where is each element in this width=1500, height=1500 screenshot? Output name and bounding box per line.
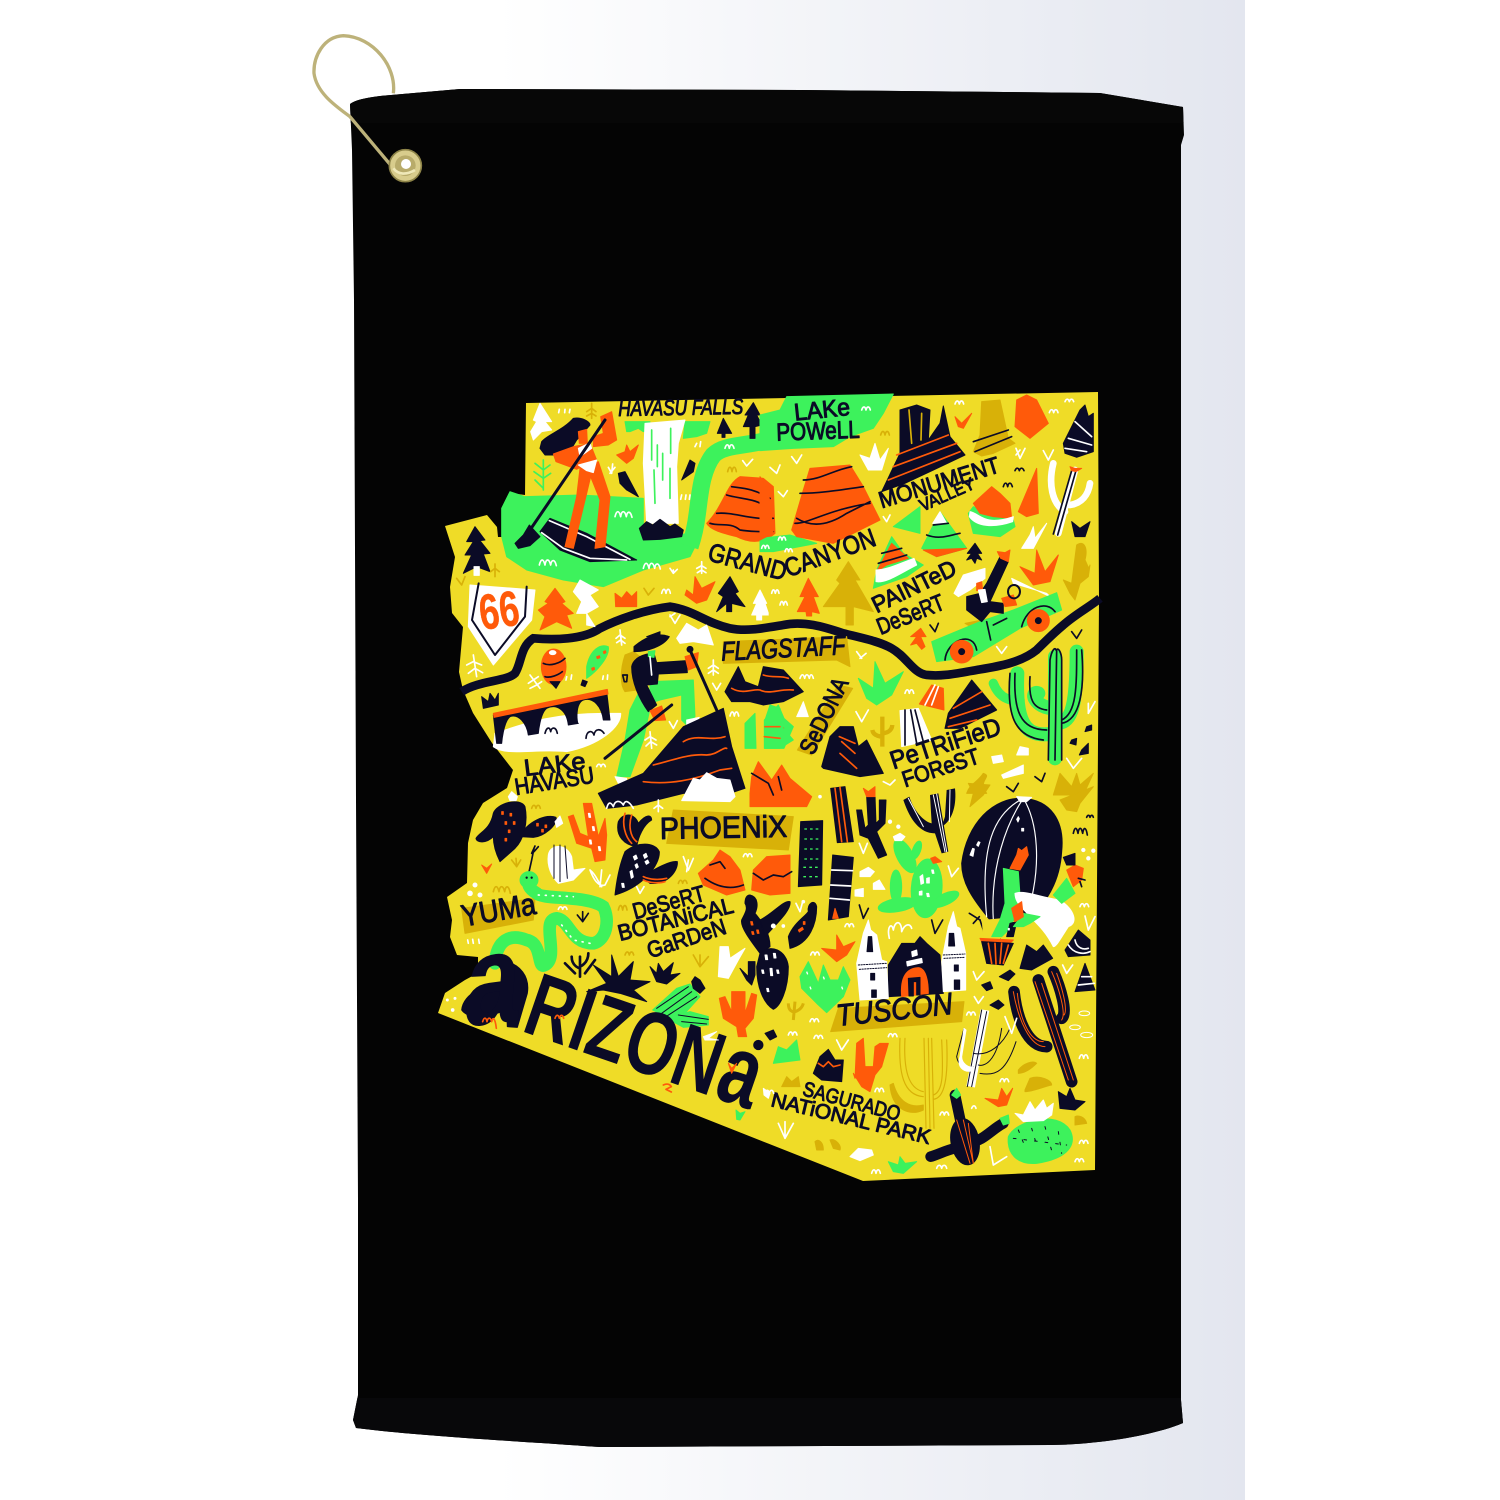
navy rocks right — [982, 930, 1095, 1009]
squiggles and tufts — [765, 783, 1095, 1173]
route 66 sign: 66 — [475, 580, 523, 641]
green lake and river — [502, 422, 773, 587]
label: Desert Botanical Garden: BOTANiCAL — [615, 892, 736, 946]
Monument Valley butte — [882, 405, 965, 492]
hot air balloon small — [541, 646, 608, 688]
volcano rock under hiker — [598, 708, 745, 808]
metal hook and grommet — [314, 36, 421, 182]
product photo: Arizona map towel — [312, 0, 1245, 1500]
label: Lake Powell: LAKe — [793, 394, 851, 427]
hiker — [605, 632, 717, 783]
labels: Grand Canyon and Monument Valley: VALLEY — [916, 473, 978, 515]
label: Phoenix: PHOENiX — [660, 810, 787, 846]
Phoenix banner — [667, 810, 793, 850]
map: northwest section — [457, 394, 1100, 808]
label: Sagurado National Park: NATiONAL PARK — [769, 1088, 933, 1149]
orange cactus — [568, 803, 607, 862]
desert plants — [565, 895, 770, 1037]
saguaro green — [993, 649, 1092, 760]
label: Arizona: RIZON — [514, 954, 737, 1115]
San Xavier mission — [857, 912, 966, 1000]
small saguaro bottom — [931, 1088, 1009, 1167]
Tuscon banner — [831, 1002, 964, 1032]
rocks and plants — [615, 477, 850, 748]
orange mesa rocks — [698, 850, 792, 895]
Lake Powell water — [760, 394, 893, 451]
white saguaro — [1051, 463, 1090, 535]
label: Sedona: SeDONA — [794, 673, 855, 759]
paddleboarder — [515, 412, 617, 548]
label: Lake Havasu: LAKe — [522, 748, 587, 781]
squiggles and tufts — [457, 409, 753, 767]
pear cactus lower — [757, 902, 888, 1092]
white outline cactus — [957, 1010, 1016, 1087]
mustard saguaro — [890, 1038, 947, 1128]
decorative blob behind the Arizona wordmark — [462, 962, 528, 1027]
label: Flagstaff: FLAGSTAFF — [720, 630, 847, 667]
squiggles and tufts — [468, 800, 752, 967]
Havasu waterfall — [617, 420, 695, 540]
label: Tuscon: TUSCON — [835, 987, 955, 1033]
labels: Grand Canyon and Monument Valley: MONUMENT — [876, 452, 1003, 513]
label: Desert Botanical Garden: DeSeRT — [630, 880, 708, 924]
central plants and rocks — [750, 413, 1093, 807]
label: Lake Havasu — [513, 748, 596, 800]
label: Havasu Falls: HAVASU FALLS — [618, 394, 744, 421]
map: northeast section — [750, 394, 1095, 807]
label: Sagurado National Park: SAGURADO — [800, 1078, 903, 1126]
snake — [495, 846, 607, 966]
label: Petrified Forest: PeTRiFieD — [887, 713, 1005, 775]
label: Painted Desert: PAINTeD — [867, 555, 960, 618]
Yuma banner — [462, 898, 535, 933]
squiggles and tufts — [762, 399, 1095, 792]
golf towel body — [340, 80, 1200, 1460]
saguaro navy striped — [1013, 972, 1073, 1082]
label: Grand (Canyon): GRAND — [705, 537, 790, 586]
prickly pear navy left — [476, 792, 563, 862]
label: Desert Botanical Garden: GaRDeN — [644, 913, 729, 963]
label: Arizona: a — [705, 1012, 780, 1131]
green prickly pear — [877, 833, 961, 919]
green barrel cactus — [815, 1062, 1087, 1173]
columns and skyscraper — [798, 787, 955, 920]
Lake Havasu bridge — [482, 689, 621, 752]
labels: Grand Canyon and Monument Valley — [780, 452, 1003, 583]
label: Lake Havasu: HAVASU — [513, 762, 596, 800]
road trip car — [932, 550, 1062, 663]
large balloon and aerialist — [962, 797, 1085, 965]
label: Petrified Forest: FOReST — [899, 743, 983, 792]
label: Yuma: YUMa — [459, 887, 539, 934]
label: Lake Powell — [776, 394, 860, 447]
buttes and rocks — [760, 395, 1093, 588]
trees — [463, 403, 768, 748]
striped white rock — [548, 845, 610, 887]
navy pear cactus center — [615, 813, 677, 895]
label: Lake Powell: POWeLL — [776, 417, 860, 447]
route 66 sign — [468, 580, 535, 665]
map: Arizona state shape — [438, 392, 1099, 1181]
label: Painted Desert: DeSeRT — [873, 589, 948, 640]
marks on the Arizona dots — [446, 883, 770, 1120]
road — [462, 598, 1100, 692]
labels: Grand Canyon and Monument Valley: CANYON — [780, 522, 880, 583]
label: Desert Botanical Garden — [615, 880, 736, 963]
map: southwest section — [426, 792, 793, 1150]
label: Arizona: a — [426, 887, 562, 1071]
map: southeast section — [757, 783, 1095, 1173]
paddleboard — [540, 518, 637, 562]
pine trees — [757, 543, 982, 649]
